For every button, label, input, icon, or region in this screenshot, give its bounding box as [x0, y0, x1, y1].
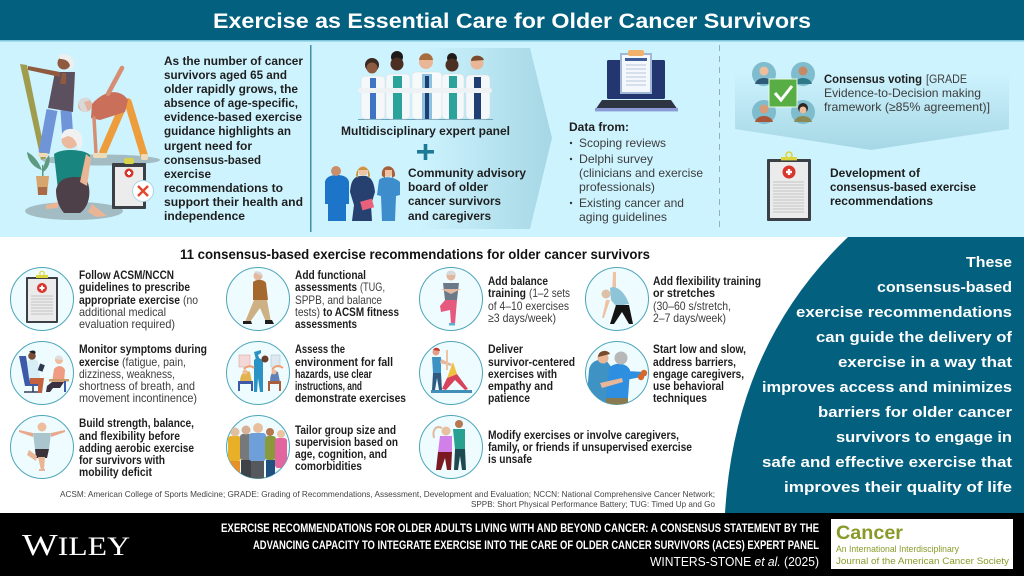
publisher logo: WILEY: [22, 527, 130, 562]
bending man: [78, 68, 148, 160]
text: modify exercises: [488, 428, 692, 466]
text: data sources: Data from:: [569, 120, 629, 134]
citation text: WINTERS-STONE et al. (2025): [650, 555, 819, 569]
citation text: [221, 523, 819, 569]
text: consensus voting: framework (≥85% agreement)]: [824, 100, 990, 114]
text: flexibility training: 2–7 days/week): [653, 311, 726, 325]
text: start low and slow: [653, 342, 746, 405]
footnote: abbreviations: ACSM: American College of Sports Medicine; GRADE: Grading of Recommendations, Assessment, Development and Evaluation; NCCN: National Comprehensive Cancer Network;: [60, 490, 715, 499]
icon: laptop with checklist: [595, 50, 678, 111]
plant: [27, 152, 50, 195]
panel: teal conclusion: consensus-based: [877, 280, 1012, 296]
text: balance training: of 4–10 exercises: [488, 299, 569, 313]
text: balance training: Add balance: [488, 274, 548, 288]
icon: trainer assisting with dumbbells: [586, 342, 648, 405]
text: flexibility training: [653, 274, 761, 325]
text: follow guidelines: guidelines to prescribe: [79, 280, 190, 294]
text: survivor-centered exercises: Deliver: [488, 342, 523, 356]
text: functional assessments: assessments: [295, 317, 357, 331]
intro text: support their health and: [164, 195, 303, 209]
intro text: recommendations to: [164, 181, 283, 195]
text: assess environment: demonstrate exercises: [295, 391, 406, 405]
text: start low and slow: engage caregivers,: [653, 367, 744, 381]
text: tailor group size: comorbidities: [295, 459, 362, 473]
text: start low and slow: use behavioral: [653, 379, 724, 393]
text: monitor symptoms: dizziness, weakness,: [79, 367, 175, 381]
journal logo: [831, 519, 1013, 569]
text: build strength: Build strength, balance,: [79, 416, 194, 430]
text: follow guidelines: additional medical: [79, 305, 166, 319]
journal logo: Cancer: [836, 523, 904, 544]
text: flexibility training: or stretches: [653, 286, 715, 300]
icon: flexibility stretch: [586, 268, 648, 330]
text: consensus voting: Consensus voting: [824, 72, 922, 86]
text: build strength: for survivors with: [79, 453, 165, 467]
icon: caregiver exercise: [420, 416, 482, 478]
text: monitor symptoms: shortness of breath, and: [79, 379, 195, 393]
panel: teal conclusion: These: [966, 255, 1012, 271]
text: functional assessments: tests): [295, 305, 320, 319]
panel: teal conclusion: exercise recommendations: [796, 305, 1012, 321]
text: modify exercises: is unsafe: [488, 452, 532, 466]
panel: teal conclusion: survivors to engage in: [836, 430, 1012, 446]
icon: balance training: [420, 268, 482, 330]
panel: teal conclusion: improves access and minimizes: [762, 380, 1012, 396]
text: build strength: mobility deficit: [79, 465, 152, 479]
panel: teal conclusion: can guide the delivery of: [816, 330, 1012, 346]
journal logo: Journal of the American Cancer Society: [836, 556, 1009, 567]
text: flexibility training: (30–60 s/stretch,: [653, 299, 731, 313]
journal logo: An International Interdisciplinary: [836, 544, 959, 555]
icon: environment and demonstration: [226, 342, 290, 404]
text: data sources: (clinicians and exercise: [579, 166, 703, 180]
text: data sources: Delphi survey: [579, 152, 653, 166]
intro text: As the number of cancer: [164, 54, 303, 68]
text: monitor symptoms: [79, 342, 207, 405]
text: survivor-centered exercises: patience: [488, 391, 530, 405]
intro text: evidence-based exercise: [164, 110, 302, 124]
text: data sources: aging guidelines: [579, 210, 667, 224]
text: balance training: (1–2 sets: [529, 286, 570, 300]
text: follow guidelines: Follow ACSM/NCCN: [79, 268, 174, 282]
intro text: older rapidly grows, the: [164, 82, 298, 96]
citation text: ADVANCING CAPACITY TO INTEGRATE EXERCISE INTO THE CARE OF OLDER CANCER SURVIVORS (ACES) EXPERT PANEL: [253, 540, 819, 552]
clipboard with cross: [112, 158, 154, 209]
intro text: guidance highlights an: [164, 124, 291, 138]
text: data sources: Existing cancer and: [579, 196, 684, 210]
text: start low and slow: techniques: [653, 391, 707, 405]
text: survivor-centered exercises: [488, 342, 575, 405]
text: development of recommendations: [830, 166, 976, 208]
standing woman: [28, 54, 75, 157]
text: monitor symptoms: Monitor symptoms during: [79, 342, 207, 356]
panel: consensus voting chevron: [735, 72, 1009, 150]
text: monitor symptoms: exercise: [79, 355, 119, 369]
text: functional assessments: SPPB, and balance: [295, 293, 382, 307]
panel: teal conclusion: improves their quality of life: [784, 480, 1012, 496]
icon: plus: [417, 144, 434, 160]
footnote: abbreviations: [60, 490, 715, 509]
text: tailor group size: [295, 423, 398, 473]
text: follow guidelines: evaluation required): [79, 317, 175, 331]
text: build strength: and flexibility before: [79, 429, 180, 443]
text: functional assessments: assessments: [295, 280, 357, 294]
text: tailor group size: age, cognition, and: [295, 447, 387, 461]
top background band: [0, 42, 1024, 237]
dashed divider: [718, 45, 720, 232]
text: monitor symptoms: (fatigue, pain,: [122, 355, 186, 369]
text: development of recommendations: Development of: [830, 166, 921, 180]
text: consensus voting: [824, 72, 990, 114]
text: tailor group size: Tailor group size and: [295, 423, 396, 437]
text: survivor-centered exercises: empathy and: [488, 379, 553, 393]
text: assess environment: Assess the: [295, 342, 345, 356]
seated woman: [46, 129, 107, 217]
text: assess environment: hazards, use clear: [295, 367, 372, 381]
text: start low and slow: address barriers,: [653, 355, 736, 369]
icon: single leg balance: [10, 416, 74, 478]
text: build strength: adding aerobic exercise: [79, 441, 194, 455]
footer bar: [0, 513, 1024, 576]
text: assess environment: environment for fall: [295, 355, 393, 369]
vertical divider: [310, 45, 312, 232]
intro text: exercise: [164, 167, 211, 181]
text: functional assessments: Add functional: [295, 268, 366, 282]
intro text: absence of age-specific,: [164, 96, 298, 110]
intro text: independence: [164, 209, 245, 223]
text: data sources: professionals): [579, 180, 655, 194]
heading: 11 recommendations: 11 consensus-based exercise recommendations for older cancer survivors: [180, 247, 650, 262]
title banner: Exercise as Essential Care for Older Cancer Survivors: [213, 10, 811, 33]
panel: teal conclusion: safe and effective exercise that: [762, 455, 1012, 471]
footnote: abbreviations: SPPB: Short Physical Performance Battery; TUG: Timed Up and Go: [471, 500, 715, 509]
icon: voters with check: [752, 62, 815, 124]
text: balance training: [488, 274, 570, 325]
intro text: survivors aged 65 and: [164, 68, 287, 82]
text: follow guidelines: appropriate exercise: [79, 293, 180, 307]
text: survivor-centered exercises: survivor-centered: [488, 355, 575, 369]
text: survivor-centered exercises: exercises with: [488, 367, 557, 381]
panel: teal conclusion: [725, 237, 1024, 513]
text: tailor group size: supervision based on: [295, 435, 398, 449]
icon: group of older adults: [226, 416, 290, 483]
text: monitor symptoms: movement incontinence): [79, 391, 197, 405]
text: build strength: [79, 416, 194, 479]
icon: expert doctors: [358, 51, 493, 120]
text: functional assessments: [295, 268, 399, 331]
label: expert panel: Multidisciplinary expert panel: [341, 124, 510, 138]
text: development of recommendations: recommendations: [830, 194, 933, 208]
text: community advisory board: cancer survivors: [408, 194, 501, 208]
intro text: consensus-based: [164, 153, 261, 167]
text: balance training: ≥3 days/week): [488, 311, 556, 325]
text: functional assessments: to ACSM fitness: [323, 305, 399, 319]
resistance band: [20, 64, 46, 160]
citation text: EXERCISE RECOMMENDATIONS FOR OLDER ADULTS LIVING WITH AND BEYOND CANCER: A CONSENSUS STATEMENT BY THE: [221, 523, 819, 535]
text: flexibility training: Add flexibility training: [653, 274, 761, 288]
text: community advisory board: board of older: [408, 180, 488, 194]
icon: walking older adult: [226, 268, 290, 330]
text: consensus voting: Evidence-to-Decision making: [824, 86, 981, 100]
panel: teal conclusion: barriers for older cancer: [818, 405, 1012, 421]
panel: teal conclusion: exercise in a way that: [838, 355, 1012, 371]
title banner: [0, 0, 1024, 42]
text: modify exercises: Modify exercises or involve caregivers,: [488, 428, 679, 442]
panel: arrow background: [311, 48, 552, 229]
text: start low and slow: Start low and slow,: [653, 342, 746, 356]
text: assess environment: instructions, and: [295, 379, 362, 393]
text: follow guidelines: (no: [183, 293, 198, 307]
text: community advisory board: and caregivers: [408, 209, 491, 223]
text: data sources: [569, 120, 703, 224]
illustration: older adults exercising: [20, 54, 160, 220]
intro text: [164, 54, 303, 223]
text: modify exercises: family, or friends if unsupervised exercise: [488, 440, 692, 454]
text: community advisory board: Community advisory: [408, 166, 526, 180]
icon: clinician and patient: [10, 342, 74, 404]
text: functional assessments: (TUG,: [360, 280, 385, 294]
icon: community board people: [325, 166, 400, 221]
text: balance training: training: [488, 286, 526, 300]
text: follow guidelines: [79, 268, 198, 331]
text: data sources: Scoping reviews: [579, 136, 666, 150]
icon: recommendations clipboard: [767, 152, 811, 221]
icon: survivor-centered exercise: [420, 342, 482, 404]
text: assess environment: [295, 342, 406, 405]
text: consensus voting: [GRADE: [926, 72, 967, 86]
intro text: urgent need for: [164, 139, 252, 153]
icon: guideline clipboard: [10, 268, 74, 330]
text: development of recommendations: consensus-based exercise: [830, 180, 976, 194]
text: community advisory board: [408, 166, 526, 223]
